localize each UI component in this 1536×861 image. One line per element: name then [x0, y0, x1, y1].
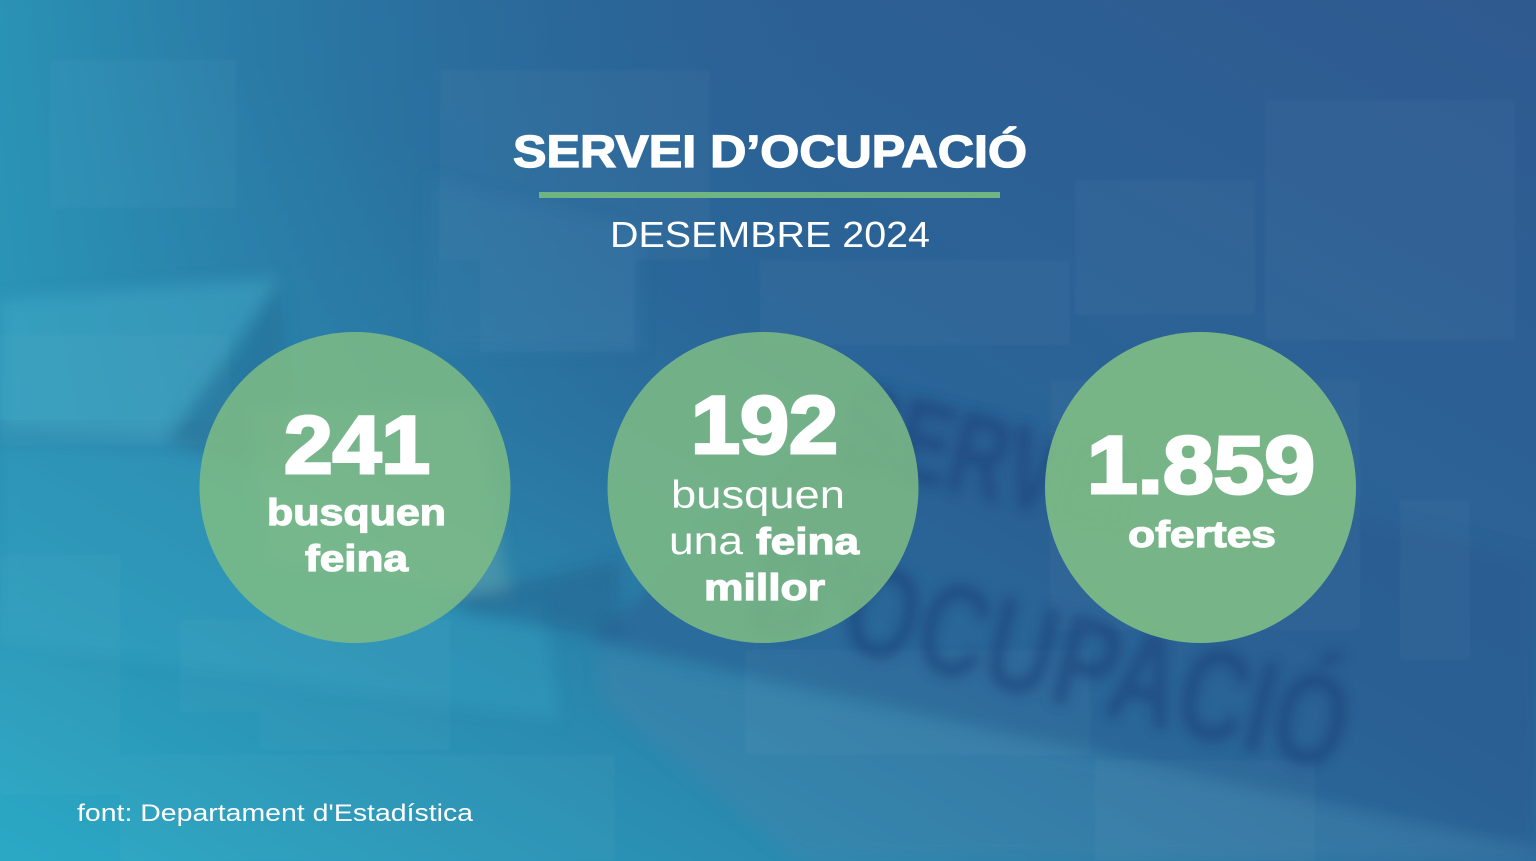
- number: 241: 241: [284, 400, 430, 491]
- number: 192: 192: [691, 380, 838, 471]
- label: busquen una feina millor: una: [669, 520, 743, 563]
- label: busquen feina: feina: [305, 538, 409, 579]
- label: busquen una feina millor: millor: [704, 567, 825, 608]
- label: busquen una feina millor: [669, 474, 860, 608]
- number: 1.859: 1.859: [1087, 420, 1315, 511]
- subtitle: DESEMBRE 2024: [610, 214, 930, 255]
- label: ofertes: ofertes: [1128, 514, 1276, 555]
- blurred sign lettering: [738, 359, 1366, 800]
- title underline: [539, 192, 1000, 198]
- label: busquen feina: busquen: [267, 492, 446, 533]
- label: busquen feina: [267, 492, 446, 579]
- stat circle: 192 busquen una feina millor: [608, 332, 918, 643]
- stat circle: 1.859 ofertes: [1045, 332, 1356, 643]
- label: busquen una feina millor: busquen: [671, 474, 845, 517]
- source note: font: Departament d'Estadística: [77, 800, 474, 827]
- blurred sign lettering: SERVEI: [829, 359, 1152, 560]
- stat circle: 241 busquen feina: [200, 332, 510, 643]
- label: busquen una feina millor: feina: [756, 521, 860, 562]
- title: SERVEI D’OCUPACIÓ: [513, 126, 1027, 177]
